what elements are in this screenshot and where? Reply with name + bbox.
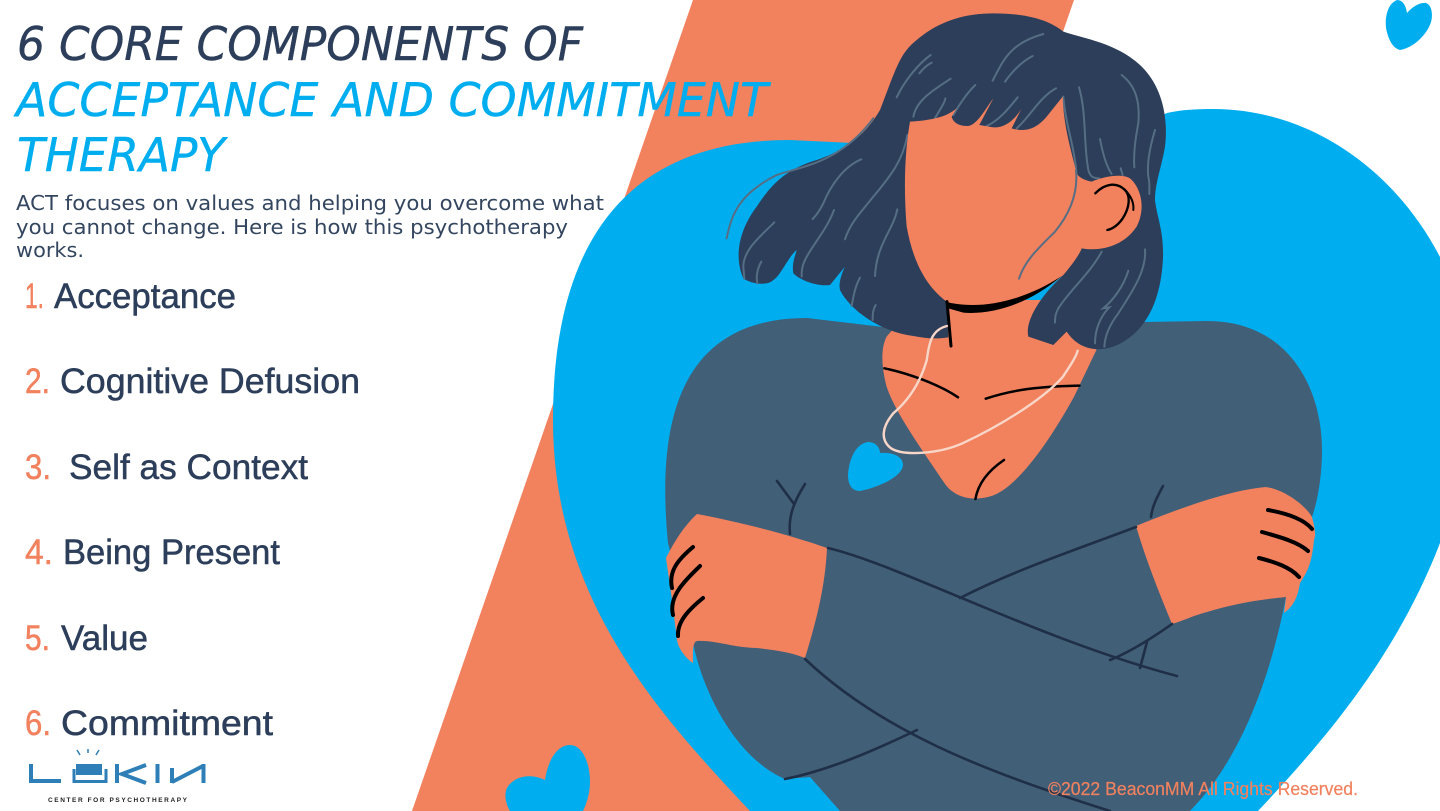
item 6: Commitment bbox=[61, 704, 273, 743]
hair strands bbox=[727, 34, 1155, 347]
icon: small heart top right bbox=[1386, 0, 1432, 50]
item 2: Cognitive Defusion bbox=[60, 362, 360, 401]
logo: Lokin Center for Psychotherapy bbox=[31, 749, 204, 804]
illustration: woman hugging herself bbox=[665, 13, 1322, 811]
torso and sleeves bbox=[665, 318, 1322, 811]
list of six components bbox=[25, 277, 360, 743]
item 2: 2. bbox=[25, 362, 50, 401]
item 6: 6. bbox=[25, 704, 51, 743]
orange diagonal band bbox=[412, 0, 1074, 811]
intro paragraph bbox=[16, 191, 604, 262]
jaw and neck lines bbox=[945, 276, 1062, 346]
title line 1: 6 CORE COMPONENTS OF bbox=[17, 17, 584, 71]
face, fringe and ear bbox=[905, 97, 1142, 306]
item 3: 3. bbox=[25, 448, 51, 487]
intro paragraph: you cannot change. Here is how this psychotherapy bbox=[16, 215, 568, 239]
copyright notice: ©2022 BeaconMM All Rights Reserved. bbox=[1048, 779, 1358, 799]
title line 2: ACCEPTANCE AND COMMITMENT bbox=[13, 73, 772, 127]
necklace cord bbox=[884, 326, 1078, 453]
intro paragraph: ACT focuses on values and helping you overcome what bbox=[16, 191, 604, 215]
item 4: Being Present bbox=[63, 533, 280, 572]
logo wordmark graphic bbox=[31, 749, 204, 783]
intro paragraph: works. bbox=[16, 238, 84, 262]
left hand bbox=[666, 514, 827, 663]
item 3: Self as Context bbox=[69, 448, 308, 487]
hair bbox=[739, 13, 1166, 349]
chest skin bbox=[882, 300, 1096, 499]
item 5: Value bbox=[61, 619, 148, 658]
item 4: 4. bbox=[25, 533, 53, 572]
icon: heart pendant bbox=[848, 442, 903, 491]
collarbone and chest lines bbox=[884, 368, 1079, 499]
item 1: 1. bbox=[25, 277, 44, 316]
large blue heart bbox=[553, 109, 1440, 811]
right hand bbox=[1136, 487, 1315, 624]
icon: small heart bottom bbox=[505, 745, 590, 811]
title line 3: THERAPY bbox=[17, 128, 229, 182]
title bbox=[13, 17, 772, 182]
item 5: 5. bbox=[25, 619, 50, 658]
logo tagline: CENTER FOR PSYCHOTHERAPY bbox=[48, 797, 188, 804]
sleeve fold lines bbox=[777, 481, 1177, 811]
item 1: Acceptance bbox=[54, 277, 236, 316]
